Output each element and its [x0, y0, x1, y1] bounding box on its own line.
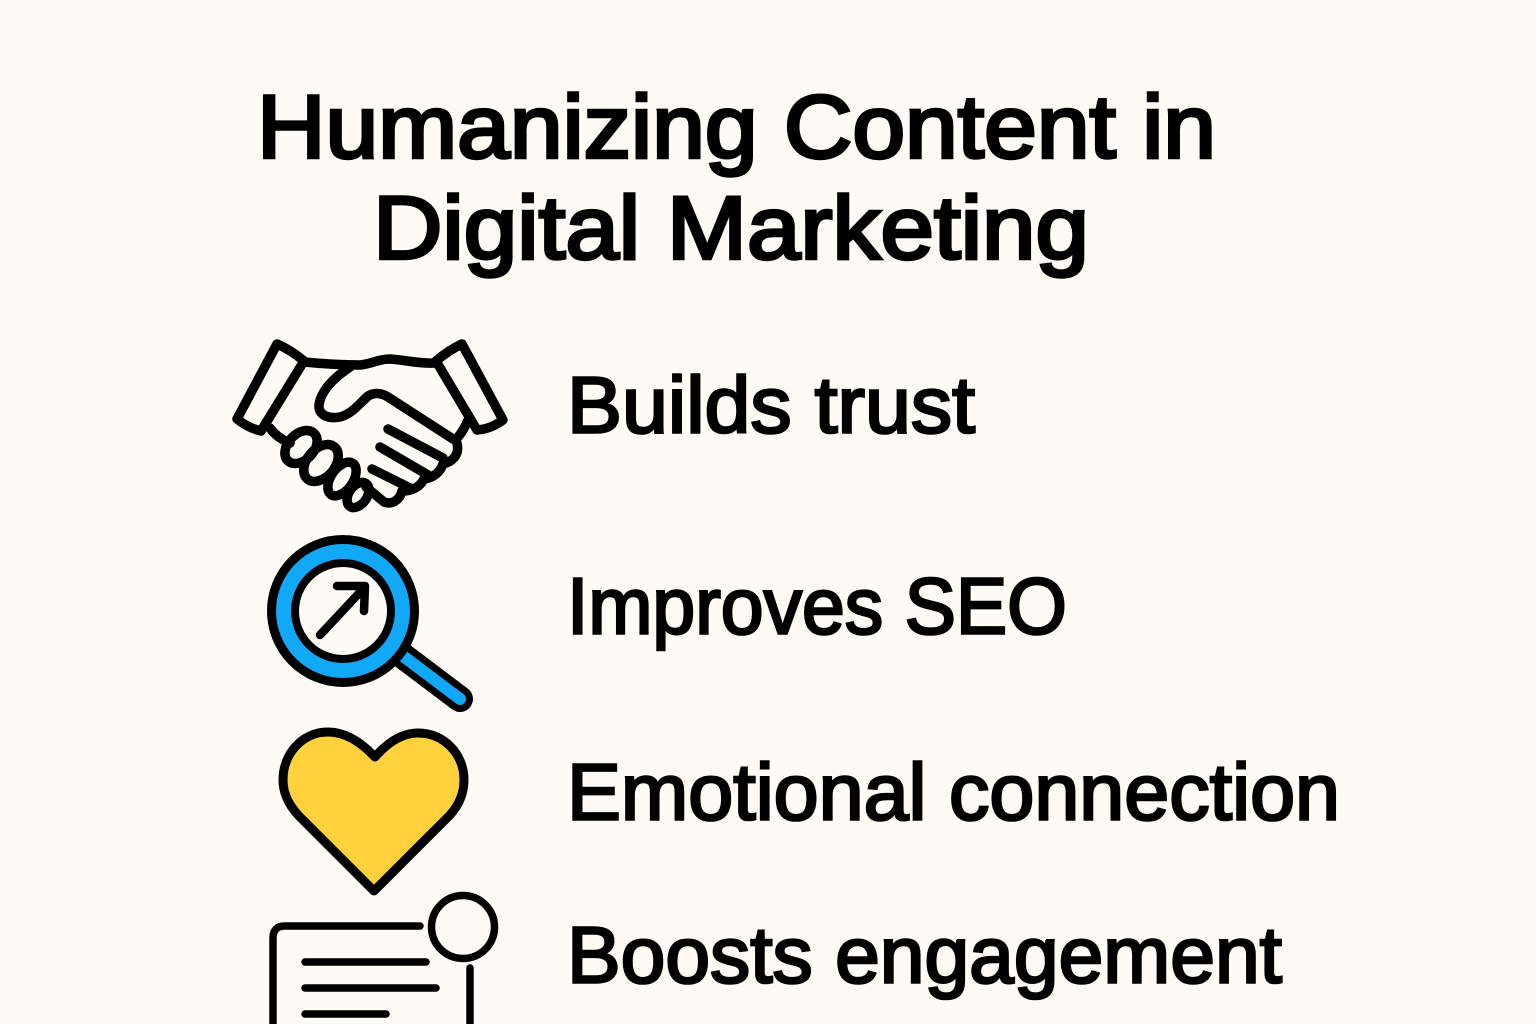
- title: Digital Marketing: [373, 178, 1089, 278]
- title: Humanizing Content in: [257, 76, 1216, 176]
- label: emotional connection: Emotional connection: [567, 748, 1340, 836]
- icon: handshake: [237, 344, 503, 512]
- label: improves seo: Improves SEO: [567, 562, 1067, 650]
- icon: magnifying glass with arrow: [272, 540, 460, 699]
- icon: heart: [283, 732, 464, 891]
- icon: document with circle: [273, 896, 494, 1024]
- label: builds trust: Builds trust: [567, 360, 975, 450]
- label: boosts engagement: Boosts engagement: [567, 910, 1282, 1000]
- title: [257, 76, 1216, 278]
